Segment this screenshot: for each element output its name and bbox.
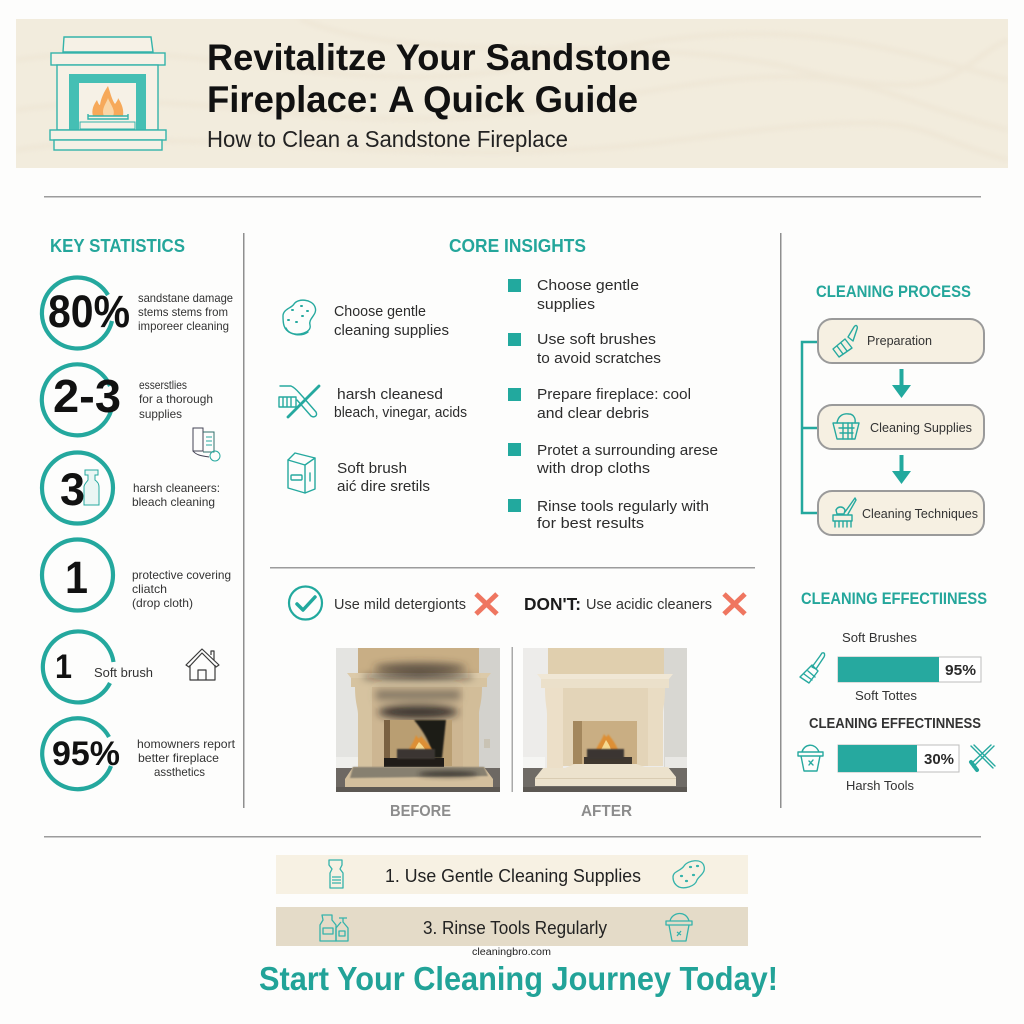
label: after: AFTER xyxy=(581,803,632,820)
stat: 2-3: esserstlies xyxy=(139,378,187,392)
bar: soft brushes 95%: 95% xyxy=(945,662,976,679)
text: gentle supplies xyxy=(334,303,449,339)
icon: bucket xyxy=(666,913,692,941)
text: soft brush xyxy=(337,460,430,495)
panel: cleaning effectiveness: Soft Brushes xyxy=(842,631,917,645)
stat: 95%: homowners report xyxy=(137,737,236,751)
do and don't row: DON'T: xyxy=(524,594,581,614)
bullet list: for best results xyxy=(537,515,644,532)
arrow xyxy=(892,455,911,484)
step: cleaning supplies: Cleaning Supplies xyxy=(870,421,972,435)
footer strip: use gentle supplies: 1. Use Gentle Cleaning Supplies xyxy=(385,866,641,886)
icon: crossed tools xyxy=(971,745,995,770)
bullet list: Choose gentle xyxy=(537,277,639,294)
stat: 2-3: for a thorough xyxy=(139,392,213,406)
bullet list: and clear debris xyxy=(537,405,649,422)
footer strip: rinse tools: 3. Rinse Tools Regularly xyxy=(423,918,607,938)
icon: fireplace xyxy=(50,37,166,150)
title xyxy=(207,37,671,120)
text: soft brush: Soft brush xyxy=(337,460,407,477)
icon: house xyxy=(186,649,219,680)
stat: 1 protective covering: cliatch xyxy=(132,582,167,596)
do and don't row: Use acidic cleaners xyxy=(586,597,712,613)
text: gentle supplies: cleaning supplies xyxy=(334,322,449,339)
icon: red cross xyxy=(476,594,497,614)
footer strip: use gentle supplies xyxy=(276,855,748,894)
bullet list: Use soft brushes xyxy=(537,331,656,348)
bullet list: with drop cloths xyxy=(536,460,650,477)
icon: bottle xyxy=(329,860,343,888)
icon: sponge xyxy=(673,861,704,888)
soot on stone xyxy=(362,663,474,719)
icon: box xyxy=(288,453,315,493)
panel: cleaning effectiveness: Harsh Tools xyxy=(846,779,914,793)
label: before: BEFORE xyxy=(390,803,451,820)
photo: after xyxy=(523,648,687,792)
heading: key statistics: KEY STATISTICS xyxy=(50,236,185,256)
icon: red cross xyxy=(724,594,745,614)
text: harsh cleaners: harsh cleanesd xyxy=(337,386,443,403)
icon: bottles xyxy=(320,915,348,941)
heading: cleaning effectiveness: CLEANING EFFECTIINESS xyxy=(801,590,987,608)
stat: 1 protective covering: protective covering xyxy=(132,568,231,582)
footer strip: rinse tools xyxy=(276,907,748,946)
icon: check xyxy=(289,586,322,620)
stat: 1 protective covering: 1 xyxy=(65,552,88,603)
step: cleaning supplies xyxy=(818,405,984,449)
bracket connector xyxy=(802,342,818,513)
text: gentle supplies: Choose gentle xyxy=(334,303,426,320)
subheading: cleaning effectiveness: CLEANING EFFECTINNESS xyxy=(809,716,981,732)
source url: cleaningbro.com xyxy=(472,947,551,958)
stat: 80% xyxy=(42,278,233,349)
heading: cleaning process: CLEANING PROCESS xyxy=(816,282,971,301)
panel: key statistics xyxy=(42,236,236,789)
arrow xyxy=(892,369,911,398)
bullet list: supplies xyxy=(537,296,595,313)
stat: 95%: 95% xyxy=(52,735,120,773)
do and don't row xyxy=(289,586,745,620)
step: cleaning techniques: Cleaning Techniques xyxy=(862,507,978,521)
bar: soft brushes 95% xyxy=(838,657,981,682)
step: preparation xyxy=(818,319,984,363)
bullet list: to avoid scratches xyxy=(537,350,661,367)
title: Revitalitze Your Sandstone xyxy=(207,37,671,78)
header banner xyxy=(16,19,1008,168)
heading: core insights: CORE INSIGHTS xyxy=(449,236,586,256)
text: harsh cleaners xyxy=(334,386,467,421)
panel: cleaning effectiveness xyxy=(798,590,995,793)
stat: 80%: sandstane damage xyxy=(138,291,233,305)
stat: 80%: imporeer cleaning xyxy=(138,319,229,333)
stat: 95%: better fireplace xyxy=(138,751,219,765)
bar: harsh tools 30% xyxy=(838,745,959,772)
stat: 3 xyxy=(42,452,220,524)
bar: harsh tools 30%: 30% xyxy=(924,751,954,768)
stat: 1 protective covering xyxy=(42,540,231,610)
icon: bottle xyxy=(84,470,99,505)
stat: 1 soft brush xyxy=(43,631,219,702)
do and don't row: Use mild detergionts xyxy=(334,597,466,613)
stat: 2-3 xyxy=(42,364,220,461)
stat: 80%: stems stems from xyxy=(138,305,228,319)
stat: 1 soft brush: 1 xyxy=(55,648,72,686)
stat: 2-3: supplies xyxy=(139,407,182,421)
subtitle: How to Clean a Sandstone Fireplace xyxy=(207,126,568,152)
stat: 2-3: 2-3 xyxy=(53,370,121,422)
stat: 1 soft brush: Soft brush xyxy=(94,666,153,680)
icon: document xyxy=(193,428,220,461)
stat: 95%: assthetics xyxy=(154,765,205,779)
bullet list: Prepare fireplace: cool xyxy=(537,386,691,403)
step: cleaning techniques xyxy=(818,491,984,535)
panel: cleaning process xyxy=(802,282,984,535)
stat: 3: bleach cleaning xyxy=(132,495,215,509)
title: Fireplace: A Quick Guide xyxy=(207,79,638,120)
stat: 80%: 80% xyxy=(48,286,130,337)
stat: 1 protective covering: (drop cloth) xyxy=(132,596,193,610)
icon: bucket xyxy=(798,745,823,771)
photo: before xyxy=(336,648,500,792)
step: preparation: Preparation xyxy=(867,334,932,348)
bullet list: Protet a surrounding arese xyxy=(537,442,718,459)
text: soft brush: aić dire sretils xyxy=(337,478,430,495)
bullet list xyxy=(508,277,718,532)
icon: crossed brush xyxy=(279,386,319,417)
stat: 3: harsh cleaneers: xyxy=(133,481,220,495)
panel: cleaning effectiveness: Soft Tottes xyxy=(855,689,917,703)
stat: 3: 3 xyxy=(60,464,85,515)
panel: core insights xyxy=(270,236,755,820)
icon: brush xyxy=(800,653,825,683)
stat: 95% xyxy=(42,718,236,789)
bullet list: Rinse tools regularly with xyxy=(537,498,709,515)
text: harsh cleaners: bleach, vinegar, acids xyxy=(334,404,467,421)
call to action: Start Your Cleaning Journey Today! xyxy=(259,960,778,997)
icon: sponge xyxy=(283,300,316,335)
